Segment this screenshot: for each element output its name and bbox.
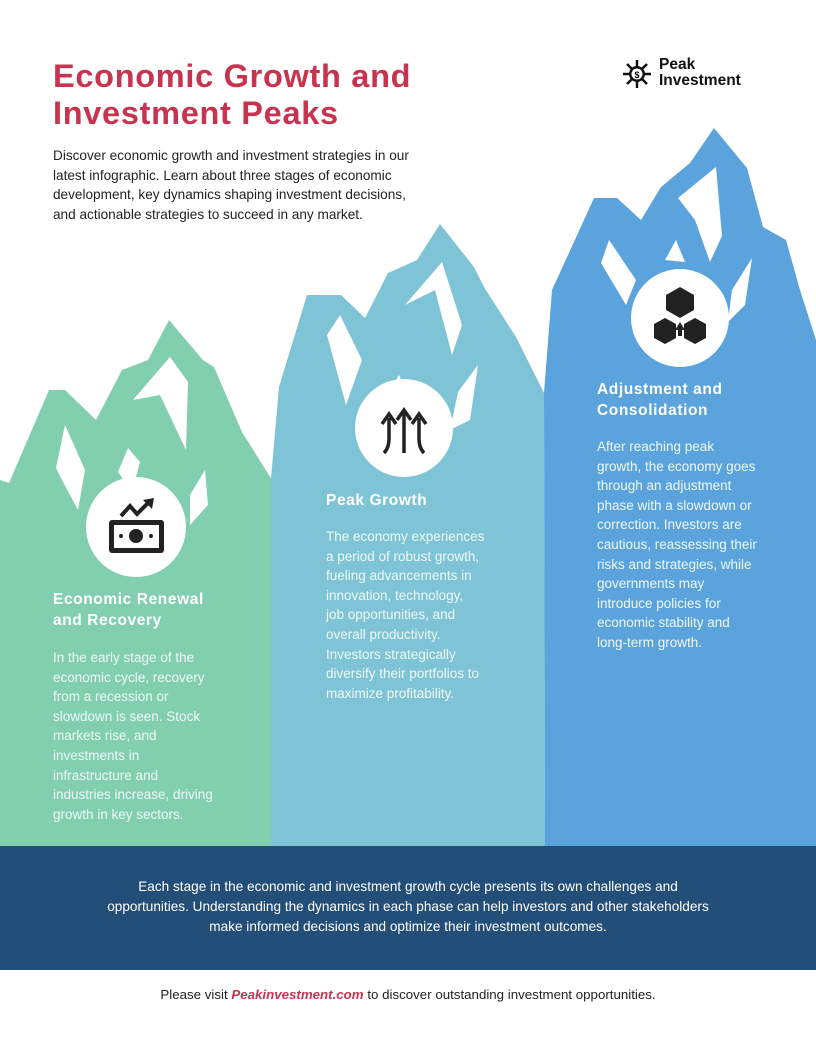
text: renewal bbox=[53, 650, 213, 822]
intro text: and actionable strategies to succeed in any market. bbox=[53, 206, 363, 222]
icon: arrows up bbox=[382, 410, 426, 453]
intro text: Discover economic growth and investment strategies in our bbox=[53, 148, 409, 163]
mountain: blue bbox=[544, 128, 816, 846]
intro text bbox=[53, 148, 409, 222]
text: adjustment: economic stability and bbox=[597, 615, 730, 630]
text: peak growth bbox=[326, 529, 484, 701]
text: renewal: economic cycle, recovery bbox=[53, 670, 205, 685]
logo: $ bbox=[634, 70, 640, 80]
summary text: make informed decisions and optimize their investment outcomes. bbox=[209, 919, 607, 934]
text: renewal: industries increase, driving bbox=[53, 787, 213, 802]
text: adjustment: cautious, reassessing their bbox=[597, 537, 757, 552]
heading: adjustment bbox=[597, 381, 723, 419]
title bbox=[53, 58, 411, 131]
text: renewal: from a recession or bbox=[53, 689, 169, 704]
text: renewal: investments in bbox=[53, 748, 139, 763]
text: peak growth: fueling advancements in bbox=[326, 568, 472, 583]
icon: money with up chart bbox=[109, 498, 164, 553]
text: renewal: slowdown is seen. Stock bbox=[53, 709, 200, 724]
heading: renewal bbox=[53, 591, 204, 629]
icon circles bbox=[86, 477, 186, 577]
text: adjustment: long-term growth. bbox=[597, 635, 702, 650]
text: peak growth: diversify their portfolios to bbox=[326, 666, 479, 681]
title: Economic Growth and bbox=[53, 58, 411, 94]
summary text: Each stage in the economic and investment growth cycle presents its own challenges and bbox=[138, 879, 678, 894]
footer: Please visit Peakinvestment.com to discover outstanding investment opportunities. bbox=[160, 987, 656, 1002]
text: adjustment: governments may bbox=[597, 576, 704, 591]
text: peak growth: overall productivity. bbox=[326, 627, 441, 642]
intro text: latest infographic. Learn about three stages of economic bbox=[53, 168, 392, 182]
heading: renewal: and Recovery bbox=[53, 612, 162, 629]
text: adjustment: correction. Investors are bbox=[597, 517, 742, 532]
title: Investment Peaks bbox=[53, 95, 339, 131]
mountain: teal bbox=[271, 224, 545, 846]
logo: Peak bbox=[659, 56, 695, 73]
mountain: green bbox=[0, 320, 272, 846]
text: adjustment: phase with a slowdown or bbox=[597, 498, 752, 513]
text: peak growth: innovation, technology, bbox=[326, 588, 463, 603]
text: adjustment: risks and strategies, while bbox=[597, 557, 752, 572]
text: adjustment bbox=[597, 439, 757, 650]
summary text bbox=[107, 879, 709, 934]
text: renewal: markets rise, and bbox=[53, 728, 157, 743]
text: renewal: infrastructure and bbox=[53, 768, 158, 783]
text: adjustment: growth, the economy goes bbox=[597, 459, 755, 474]
text: peak growth: a period of robust growth, bbox=[326, 549, 479, 564]
heading: adjustment: Adjustment and bbox=[597, 381, 723, 398]
logo bbox=[623, 56, 741, 89]
text: peak growth: maximize profitability. bbox=[326, 686, 454, 701]
text: renewal: growth in key sectors. bbox=[53, 807, 184, 822]
logo: Investment bbox=[659, 72, 741, 89]
intro text: development, key dynamics shaping investment decisions, bbox=[53, 187, 406, 202]
panel: peak growth bbox=[326, 492, 484, 701]
panel: adjustment bbox=[597, 381, 757, 650]
icon: cubes bbox=[654, 287, 706, 344]
panel: economic renewal bbox=[53, 591, 213, 822]
bottom band bbox=[0, 846, 816, 970]
text: adjustment: introduce policies for bbox=[597, 596, 721, 611]
heading: adjustment: Consolidation bbox=[597, 402, 708, 419]
text: peak growth: Investors strategically bbox=[326, 647, 456, 662]
text: peak growth: job opportunities, and bbox=[326, 607, 455, 622]
text: peak growth: The economy experiences bbox=[326, 529, 484, 544]
text: renewal: In the early stage of the bbox=[53, 650, 194, 665]
heading: renewal: Economic Renewal bbox=[53, 591, 204, 608]
heading: peak growth: Peak Growth bbox=[326, 492, 427, 509]
text: adjustment: After reaching peak bbox=[597, 439, 714, 454]
summary text: opportunities. Understanding the dynamics in each phase can help investors and other stakeholders bbox=[107, 899, 709, 914]
text: adjustment: through an adjustment bbox=[597, 478, 731, 493]
